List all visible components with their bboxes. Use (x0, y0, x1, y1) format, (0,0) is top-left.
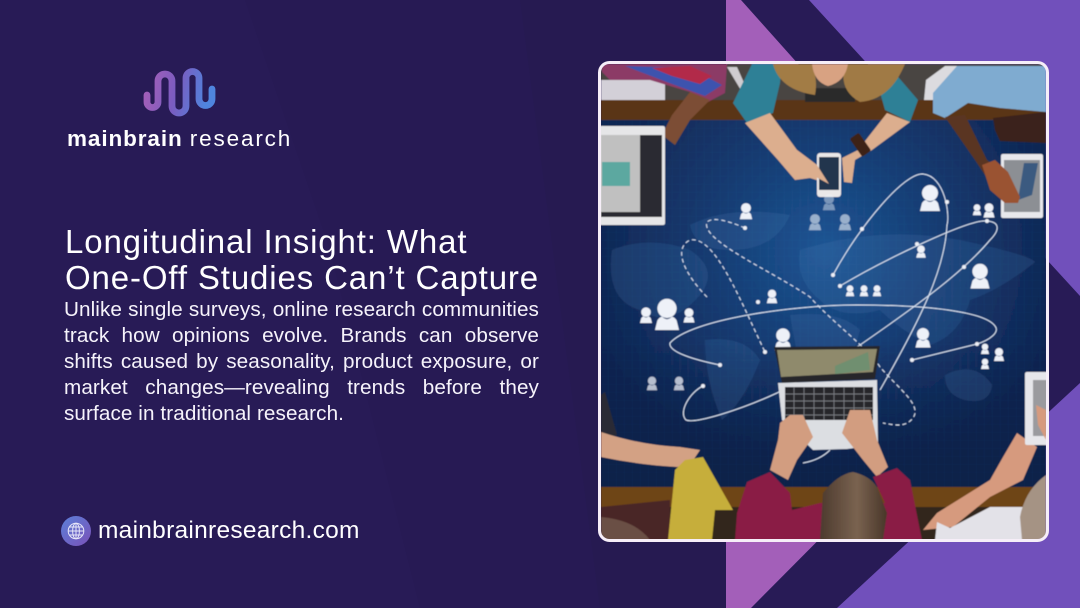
body text: market changes—revealing trends before they (64, 376, 539, 399)
network curves (670, 174, 997, 463)
photo: team around digital table (598, 61, 1049, 542)
person bottom left (601, 432, 700, 467)
title: Longitudinal Insight: What (65, 223, 467, 260)
hands on keyboard (770, 415, 813, 480)
body text: surface in traditional research. (64, 402, 344, 425)
person bottom right (923, 433, 1037, 530)
woman top centre (733, 64, 782, 123)
icon: globe (61, 516, 91, 546)
person bottom centre (735, 468, 922, 540)
world map (611, 212, 1035, 420)
room behind table (601, 64, 1046, 104)
phone (817, 153, 841, 197)
person top right (933, 66, 1046, 118)
body text (64, 298, 539, 425)
table board (601, 118, 1046, 492)
body text: shifts caused by seasonality, product exposure, or (64, 350, 539, 373)
logo mark (144, 68, 216, 116)
laptop (774, 346, 880, 383)
body text: Unlike single surveys, online research communities (64, 298, 539, 321)
title (65, 223, 539, 296)
person top left (602, 64, 727, 102)
device lower left (601, 392, 617, 438)
logo wordmark: mainbrain research (67, 126, 292, 151)
photo frame (600, 62, 1048, 540)
website url: mainbrainresearch.com (98, 517, 360, 544)
body text: track how opinions evolve. Brands can observe (64, 324, 539, 347)
person icons (640, 185, 1004, 390)
tablet right (1001, 154, 1043, 218)
title: One-Off Studies Can’t Capture (65, 259, 539, 296)
tablet left (596, 126, 665, 225)
wood table edges (601, 100, 1046, 120)
